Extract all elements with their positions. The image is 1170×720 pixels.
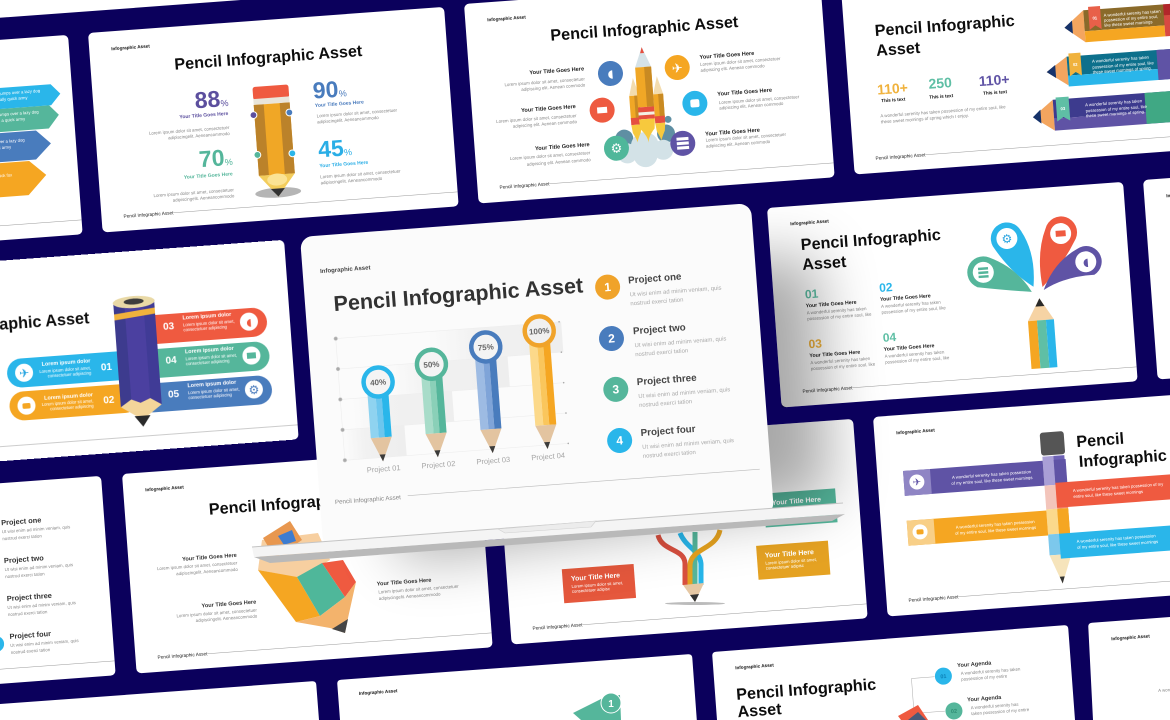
- stat 88 percent: 88%: [194, 85, 229, 113]
- pill 02: consectetuer adipiscing: [50, 403, 95, 411]
- project list text: Ut wisi enim ad minim veniam, quis: [10, 638, 80, 648]
- icon: green gear circle: [603, 135, 630, 162]
- stat 90 percent: adipiscingelit. Aeneancommodo: [317, 115, 379, 124]
- item 01: A wonderful serenity has taken: [807, 306, 867, 315]
- left text item two: Your Title Goes Here: [201, 600, 256, 610]
- illustration: green flag with badge: 1: [608, 699, 614, 710]
- agenda 02: Your Agenda: [967, 695, 1002, 703]
- pill 03: ◖: [246, 317, 252, 329]
- item 02: [879, 276, 946, 315]
- laptop shadow: [380, 255, 830, 560]
- slide footer: Pencil Infographic Asset: [532, 622, 583, 631]
- body text: [880, 104, 1007, 124]
- project list text: nostrud exerci tation: [2, 533, 43, 541]
- project three: Ut wisi enim ad minim veniam, quis: [638, 387, 730, 400]
- left text item one: Your Title Goes Here: [182, 553, 237, 563]
- agenda 01: [934, 658, 1022, 685]
- pill 04: Lorem ipsum dolor sit amet,: [185, 353, 237, 361]
- stat 70 percent: Your Title Goes Here: [184, 171, 233, 181]
- project one: nostrud exerci tation: [630, 297, 684, 307]
- item 03: possession of my entire soul, like: [811, 361, 876, 371]
- stat 110+ orange: 110+: [877, 79, 908, 98]
- project four: Ut wisi enim ad minim veniam, quis: [642, 438, 734, 451]
- icon: orange plane circle: [664, 54, 691, 81]
- red title box: Your Title Here: [571, 572, 620, 583]
- pill 05: Lorem ipsum dolor sit amet,: [188, 387, 240, 395]
- agenda 01: A wonderful serenity has taken: [961, 666, 1021, 676]
- slide footer: Pencil Infographic Asset: [875, 152, 926, 161]
- pill 01: Lorem ipsum dolor: [42, 358, 92, 368]
- left text item two: adipiscingelit. Aeneancommodo: [195, 613, 258, 623]
- slide footer: Pencil Infographic Asset: [123, 210, 174, 219]
- left text item one: adipiscingelit. Aeneancommodo: [176, 567, 239, 576]
- item 04: Your Title Goes Here: [883, 343, 935, 353]
- panel: bottom-right slide background: [1088, 617, 1170, 720]
- orange title box: consectetuer adipisc: [766, 563, 804, 571]
- illustration: petals: ◖: [1082, 256, 1089, 269]
- left text items: Your Title Goes Here: [529, 66, 584, 76]
- slide title: Pencil Infographic: [874, 12, 1015, 40]
- panel: purple pencil pills slide: [0, 240, 299, 468]
- project list text: Ut wisi enim ad minim veniam, quis: [2, 524, 71, 534]
- illustration: 3D pencil: [258, 521, 356, 633]
- orange title box: Lorem ipsum dolor sit amet,: [765, 557, 817, 566]
- stat 88 percent: Lorem ipsum dolor sit amet, consectetuer: [149, 125, 230, 136]
- agenda 02: taken possession of my entire: [971, 707, 1030, 716]
- slide title: Pencil Infographic Asset: [333, 273, 584, 316]
- slide footer: Pencil Infographic Asset: [157, 651, 208, 660]
- icon: pencil: [1026, 297, 1057, 369]
- illustration: rope pencil: [658, 530, 725, 605]
- slide label: Infographic Asset: [320, 265, 371, 275]
- right text items: [699, 48, 803, 149]
- pill 05: 05: [168, 389, 180, 401]
- agenda slide content: [734, 644, 1030, 720]
- stat 250: [928, 74, 954, 100]
- purple ribbon: A wonderful serenity has taken possession: [952, 469, 1032, 480]
- pill 01: ✈: [19, 366, 30, 381]
- illustration: petals: ⚙: [1001, 232, 1013, 246]
- pencil 40 percent: [363, 367, 399, 462]
- icon: blue circle: ◖: [607, 67, 614, 81]
- red ribbon: [1055, 469, 1170, 508]
- panel: 3D pencil slide: [122, 448, 493, 673]
- cyan ribbon: A wonderful serenity has taken possession: [1076, 533, 1156, 544]
- project four: Project four: [640, 424, 696, 439]
- slide label: Infographic Asset: [896, 427, 935, 435]
- red title box: Lorem ipsum dolor sit amet,: [571, 580, 623, 589]
- pill 03: Lorem ipsum dolor: [182, 312, 232, 321]
- icon: purple pencil: [112, 295, 164, 428]
- item 03: Your Title Goes Here: [809, 350, 861, 359]
- left text items: adipiscing elit. Aenean commodo: [527, 157, 591, 167]
- project two: [598, 317, 727, 361]
- stat 90 percent: Your Title Goes Here: [315, 99, 364, 109]
- pill 04: [135, 341, 271, 380]
- pill 01: [6, 350, 138, 388]
- panel: arrow list slide: [0, 35, 83, 260]
- panel: project list slide: [0, 476, 116, 701]
- orange arrow: [0, 160, 48, 203]
- pill 05: [137, 375, 273, 413]
- laptop base: [252, 503, 845, 563]
- illustration: agenda pencil: [898, 705, 928, 720]
- project four: [606, 419, 735, 462]
- project list text: nostrud exerci tation: [5, 571, 45, 579]
- pencil 75 percent: 75%: [477, 342, 494, 353]
- slide label: Infographic Asset: [111, 43, 150, 51]
- stat 70 percent: 70%: [198, 144, 233, 172]
- green arrow: [0, 105, 60, 138]
- axis labels: Project 04: [531, 451, 565, 462]
- cyan ribbon: [1059, 520, 1170, 559]
- icon: orange plane circle: ✈: [671, 61, 683, 77]
- item 04: A wonderful serenity has taken: [884, 349, 945, 359]
- pencil 01: 01: [1092, 15, 1098, 21]
- pill 05: Lorem ipsum dolor: [187, 380, 237, 389]
- left text items: Lorem ipsum dolor sit amet, consectetuer: [496, 113, 577, 124]
- slide footer: Pencil Infographic Asset: [908, 594, 959, 603]
- illustration: petals: [964, 214, 1104, 296]
- stat 88 percent: Your Title Goes Here: [179, 111, 229, 121]
- icon: purple stack circle: [669, 130, 696, 157]
- pencil 01: possession of my entire soul,: [1104, 14, 1158, 23]
- stat 90 percent: [312, 72, 398, 125]
- item 03: [808, 333, 876, 371]
- panel: rocket slide: [464, 0, 835, 203]
- project two: Project two: [633, 322, 686, 337]
- slide title: Pencil Infographic: [736, 676, 877, 704]
- right text items: Lorem ipsum dolor sit amet, consectetuer: [700, 56, 781, 67]
- slide title: Pencil Infographic Asset: [550, 13, 739, 45]
- stat 110+ orange: This is text: [881, 97, 906, 103]
- project list text: Project four: [9, 629, 51, 641]
- icon: blue circle: [597, 60, 624, 87]
- chart: pencil bars: [333, 315, 571, 476]
- slide label: Infographic Asset: [790, 218, 829, 226]
- body text: these sweet mornings of spring which I enjoy.: [881, 113, 969, 124]
- pencil 01: like these sweet mornings: [1104, 19, 1153, 28]
- left text items: [493, 66, 591, 169]
- pill 02: 02: [103, 395, 115, 407]
- axis labels: Project 02: [421, 459, 456, 471]
- right text items: Lorem ipsum dolor sit amet, consectetuer: [719, 94, 800, 105]
- project list text: [1, 513, 80, 655]
- slide title: Asset: [802, 253, 848, 274]
- slide title: [874, 12, 1017, 60]
- orange ribbon: [907, 509, 1070, 546]
- pencil 01: A wonderful serenity has taken: [1103, 9, 1161, 18]
- pill 03: consectetuer adipiscing: [183, 324, 228, 332]
- project one: Ut wisi enim ad minim veniam, quis: [630, 286, 722, 298]
- left text item two: [176, 599, 258, 624]
- stat 45 percent: adipiscingelit. Aeneancommodo: [320, 176, 383, 185]
- slide title: Pencil: [1076, 430, 1125, 451]
- project list text: nostrud exerci tation: [11, 647, 51, 655]
- slide footer: [908, 573, 1170, 603]
- pencil 50 percent: [416, 349, 453, 458]
- project three: [602, 368, 731, 412]
- pencil 02: 02: [1073, 62, 1078, 67]
- slide footer: [875, 131, 1170, 161]
- right text items: adipiscing elit. Aenean commodo: [706, 139, 771, 149]
- icon: green gear circle: ⚙: [610, 141, 623, 157]
- item 03: 03: [808, 336, 823, 351]
- slide footer: [499, 160, 834, 190]
- slide label: bottom-centre: Infographic Asset: [359, 688, 398, 696]
- pill 03: [132, 307, 268, 346]
- axis labels: [366, 451, 565, 475]
- item 01: Your Title Goes Here: [806, 300, 857, 309]
- project list text: Project one: [1, 515, 42, 527]
- red ribbon: entire soul, like these sweet mornings: [1073, 489, 1143, 499]
- slide title: Pencil Infographic Asset: [208, 487, 398, 519]
- purple ribbon: of my entire soul, like these sweet mornings: [951, 475, 1033, 486]
- left text items: adipiscing elit. Aenean commodo: [521, 82, 586, 92]
- pencil 75 percent: [470, 331, 508, 454]
- pill 04: 04: [165, 355, 178, 367]
- pill 04: consectetuer adipiscing: [186, 358, 230, 366]
- stat 70 percent: Lorem ipsum dolor sit amet, consectetuer: [153, 187, 235, 198]
- agenda 02: A wonderful serenity has: [971, 702, 1019, 710]
- project list text: Project two: [4, 553, 45, 565]
- orange ribbon: A wonderful serenity has taken possession: [956, 519, 1036, 530]
- slide label: Infographic Asset: [1111, 633, 1150, 641]
- pencil 02: possession of my entire soul, like: [1092, 60, 1155, 70]
- stat 70 percent: [150, 144, 235, 204]
- item 03: A wonderful serenity has taken: [810, 356, 871, 365]
- slide title: [1076, 427, 1167, 471]
- stat 45 percent: Your Title Goes Here: [319, 160, 369, 169]
- agenda 01: Your Agenda: [957, 661, 992, 669]
- stat 45 percent: Lorem ipsum dolor sit amet, consectetuer: [320, 168, 401, 179]
- project three: 3: [612, 382, 620, 397]
- project two: 2: [608, 331, 616, 346]
- agenda 02: 02: [951, 709, 957, 715]
- orange ribbon: of my entire soul, like these sweet mornings: [955, 525, 1036, 536]
- panel: percent pencil slide: [88, 7, 459, 232]
- left text item one: [156, 553, 239, 578]
- panel: top-left sliver slide: [0, 0, 251, 25]
- icon: red shop circle: [589, 97, 616, 124]
- project one: 1: [604, 280, 612, 294]
- slide title: Pencil Infographic: [800, 226, 941, 254]
- left text items: Your Title Goes Here: [521, 104, 576, 114]
- pill 03: Lorem ipsum dolor sit amet,: [183, 319, 235, 327]
- pill 02: Lorem ipsum dolor sit amet,: [42, 398, 93, 407]
- pencil 02: A wonderful serenity has taken: [1092, 55, 1150, 64]
- stat 45 percent: 45%: [317, 134, 353, 162]
- project list text: Ut wisi enim ad minim veniam, quis: [4, 562, 74, 572]
- pill 04: Lorem ipsum dolor: [185, 346, 235, 355]
- left text items: Lorem ipsum dolor sit amet, consectetuer: [510, 150, 591, 161]
- illustration: green flag with badge: [573, 693, 621, 720]
- purple ribbon: [903, 459, 1067, 496]
- slide title: [800, 226, 943, 274]
- project one: [594, 266, 722, 310]
- stat 45 percent: [317, 131, 402, 185]
- pill 03: 03: [163, 321, 175, 333]
- orange title box: Your Title Here: [765, 549, 814, 560]
- pill 01: 01: [101, 362, 113, 374]
- stat 90 percent: Lorem ipsum dolor sit amet, consectetuer: [317, 108, 398, 118]
- panel: ribbon pencil slide: [873, 390, 1170, 616]
- body text: A wonderful serenity has taken possession of my entire soul, like: [880, 104, 1006, 118]
- pencil 100 percent: [524, 315, 563, 450]
- stat 70 percent: adipiscingelit. Aeneancommodo: [173, 193, 235, 203]
- item 04: possession of my entire soul, like: [885, 355, 950, 365]
- item 01: possession of my entire soul, like: [807, 312, 872, 321]
- slide footer: Pencil Infographic Asset: [335, 494, 401, 506]
- project list text: nostrud exerci tation: [8, 609, 48, 617]
- item 01: 01: [804, 286, 819, 301]
- stat 110+ purple: 110+: [978, 71, 1010, 89]
- stat 88 percent: adipiscingelit. Aeneancommodo: [168, 131, 230, 140]
- agenda 01: 01: [940, 674, 947, 680]
- green title box: Your Title Here: [772, 496, 821, 507]
- pill 01: Lorem ipsum dolor sit amet,: [39, 365, 91, 374]
- icon: cyan circle: [682, 90, 708, 117]
- pill 05: consectetuer adipiscing: [188, 392, 233, 400]
- axis labels: Project 03: [476, 455, 510, 466]
- slide title: [736, 676, 878, 720]
- stat 250: This is text: [929, 93, 954, 100]
- slide label: Infographic Asset: [487, 14, 526, 22]
- red title box: consectetuer adipisc: [572, 586, 610, 594]
- pencil 02: these sweet mornings of spring.: [1093, 65, 1152, 75]
- stat 110+ purple: This is text: [983, 89, 1008, 96]
- left text items: adipiscing elit. Aenean commodo: [513, 119, 578, 129]
- right text items: Your Title Goes Here: [705, 128, 760, 138]
- panel: horizontal pencils slide: [840, 0, 1170, 174]
- left text items: Your Title Goes Here: [535, 142, 590, 152]
- slide footer: [532, 601, 867, 631]
- pencil 100 percent: 100%: [529, 326, 550, 337]
- slide footer: Pencil Infographic Asset: [499, 181, 550, 190]
- project four: nostrud exerci tation: [643, 450, 696, 460]
- project three: Project three: [636, 373, 698, 388]
- item 04: 04: [882, 330, 897, 345]
- red title box: [562, 564, 636, 603]
- right text item: adipiscingelit. Aeneancommodo: [379, 591, 441, 601]
- slide footer: [335, 467, 760, 506]
- agenda 02: [945, 693, 1030, 720]
- right text items: Your Title Goes Here: [717, 88, 772, 98]
- left text item one: Lorem ipsum dolor sit amet, consectetuer: [157, 560, 238, 571]
- pencil 40 percent: 40%: [370, 377, 386, 388]
- item 01: [804, 283, 872, 321]
- slide footer: [157, 630, 492, 660]
- right text item: [377, 576, 460, 601]
- slide title: Infographic: [1078, 447, 1167, 471]
- axis labels: Project 01: [366, 463, 401, 475]
- orange title box: [756, 541, 830, 580]
- pill 02: [8, 383, 140, 421]
- item 02: Your Title Goes Here: [880, 293, 931, 303]
- illustration: rocket pencils and cloud: [609, 45, 677, 169]
- panel: right edge slide: [1143, 154, 1170, 379]
- chart grid: [334, 320, 569, 462]
- cyan arrow: [0, 84, 61, 115]
- stat 250: 250: [928, 74, 953, 92]
- pill 01: consectetuer adipiscing: [47, 370, 92, 379]
- panel: bottom-left slide: [0, 681, 319, 720]
- purple ribbon: ✈: [912, 477, 922, 489]
- chart bands: [336, 322, 570, 460]
- icon: pencil: [247, 84, 301, 199]
- project one: Project one: [628, 271, 682, 286]
- bottom-right slide content: [1111, 632, 1170, 696]
- right text items: adipiscing elit. Aenean commodo: [719, 101, 784, 111]
- stat 90 percent: 90%: [312, 75, 347, 104]
- right text items: Your Title Goes Here: [699, 51, 754, 61]
- slide label: Infographic Asset: [145, 484, 184, 492]
- item 02: A wonderful serenity has taken: [881, 300, 941, 309]
- slide footer: Pencil Infographic Asset: [802, 385, 853, 394]
- project list text: Project three: [6, 591, 52, 603]
- item 02: possession of my entire soul, like: [881, 305, 946, 315]
- pencil 03: 03: [1060, 106, 1066, 111]
- project three: nostrud exerci tation: [639, 399, 692, 409]
- agenda 01: possession of my entire: [961, 673, 1008, 682]
- green title box: [763, 488, 838, 528]
- pencil 03: possession of my entire soul, like: [1085, 104, 1148, 113]
- panel: tree pencil slide: [497, 419, 868, 644]
- item 02: 02: [879, 280, 893, 295]
- project two: nostrud exerci tation: [635, 348, 688, 358]
- red ribbon: A wonderful serenity has taken possession of my: [1073, 481, 1164, 493]
- pill 05: ⚙: [248, 383, 260, 397]
- slide footer: [123, 189, 458, 219]
- cyan ribbon: of my entire soul, like these sweet mornings: [1077, 539, 1158, 550]
- right text items: Lorem ipsum dolor sit amet, consectetuer: [705, 132, 787, 143]
- panel: bottom-centre slide: [337, 654, 697, 720]
- pencil 03: [1032, 85, 1170, 132]
- slide title: Asset: [876, 39, 921, 60]
- list circle: [0, 635, 5, 653]
- left text items: Lorem ipsum dolor sit amet, consectetuer: [504, 76, 586, 87]
- slide title: Pencil Infographic Asset: [174, 42, 363, 74]
- connector lines: [911, 676, 945, 713]
- item 04: [882, 326, 950, 365]
- project list text: Ut wisi enim ad minim veniam, quis: [7, 600, 77, 610]
- right text item: Lorem ipsum dolor sit amet, consectetuer: [378, 584, 459, 595]
- panel: petal pencil slide: [767, 182, 1138, 407]
- right text item: Your Title Goes Here: [377, 578, 432, 588]
- slide footer: [802, 364, 1137, 394]
- slide label: Infographic Asset: [735, 662, 774, 670]
- panel: laptop screen main slide: [300, 203, 774, 548]
- right text items: adipiscing elit. Aenean commodo: [700, 63, 765, 73]
- pencil 02: [1045, 43, 1170, 88]
- left text item two: Lorem ipsum dolor sit amet, consectetuer: [176, 607, 258, 618]
- stat 88 percent: [146, 85, 231, 142]
- pencil 50 percent: 50%: [423, 360, 440, 370]
- pill 02: Lorem ipsum dolor: [44, 392, 94, 402]
- panel: agenda slide background: [712, 625, 1075, 720]
- project four: 4: [616, 433, 624, 448]
- pencil 01: [1063, 0, 1170, 44]
- pencil 03: A wonderful serenity has taken: [1085, 98, 1143, 107]
- blue arrow: [0, 129, 52, 168]
- pencil 03: these sweet mornings of spring.: [1086, 109, 1145, 118]
- project two: Ut wisi enim ad minim veniam, quis: [634, 336, 727, 349]
- icon: pencil: [1040, 431, 1075, 584]
